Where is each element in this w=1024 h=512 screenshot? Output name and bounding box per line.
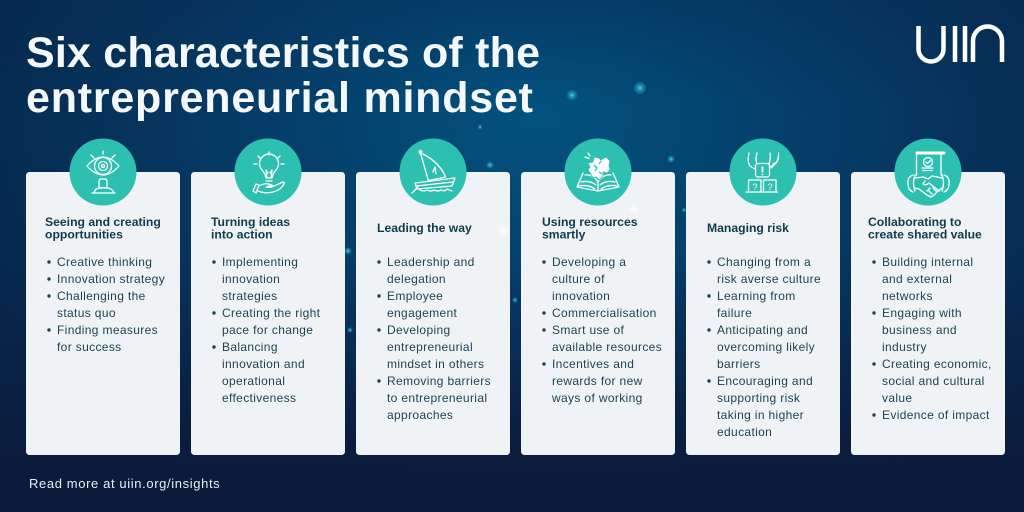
bullet list: Balancing	[222, 340, 278, 354]
bullet list: supporting risk	[717, 391, 801, 405]
bullet list: networks	[882, 289, 933, 303]
bullet list: social and cultural	[882, 374, 985, 388]
bullet list: status quo	[57, 306, 116, 320]
bullet list: for success	[57, 340, 122, 354]
bullet list: entrepreneurial	[387, 340, 473, 354]
bullet list: Learning from	[717, 289, 796, 303]
heading	[211, 215, 290, 242]
footer link text: Read more at uiin.org/insights	[29, 476, 220, 491]
heading	[542, 215, 638, 242]
logo: UIIN	[918, 26, 1002, 62]
bullet list: Developing a	[552, 255, 626, 269]
bullet list: culture of	[552, 272, 605, 286]
heading: Using resources	[542, 215, 638, 229]
bullet list: Employee	[387, 289, 443, 303]
bullet list	[47, 255, 165, 354]
title: entrepreneurial mindset	[26, 74, 533, 122]
icon: hands holding risk boxes: ?	[752, 182, 758, 193]
bullet list: and external	[882, 272, 952, 286]
icon: eye with gear	[70, 138, 136, 206]
heading: Seeing and creating	[45, 215, 161, 229]
panel: collaborating to create shared value	[851, 138, 1005, 455]
bullet list: innovation	[222, 272, 280, 286]
bullet list: Changing from a	[717, 255, 811, 269]
bullet list: Smart use of	[552, 323, 625, 337]
bullet list: Encouraging and	[717, 374, 813, 388]
bullet list	[377, 255, 491, 422]
bullet list: effectiveness	[222, 391, 296, 405]
bullet list: Engaging with	[882, 306, 962, 320]
panel: turning ideas into action	[191, 138, 345, 455]
heading: Managing risk	[707, 221, 789, 235]
bullet list: taking in higher	[717, 408, 804, 422]
heading	[868, 215, 982, 242]
bullet list: engagement	[387, 306, 458, 320]
bullet list: industry	[882, 340, 927, 354]
bullet list	[872, 255, 992, 422]
bullet list: value	[882, 391, 912, 405]
bullet list: to entrepreneurial	[387, 391, 487, 405]
title	[26, 29, 540, 122]
bullet list: pace for change	[222, 323, 313, 337]
heading: Leading the way	[377, 221, 472, 235]
bullet list: Creating the right	[222, 306, 321, 320]
bullet list: Finding measures	[57, 323, 158, 337]
bullet list: Incentives and	[552, 357, 634, 371]
bullet list	[707, 255, 821, 439]
panel: managing risk	[686, 138, 840, 455]
bullet list: operational	[222, 374, 285, 388]
bullet list: strategies	[222, 289, 278, 303]
icon: hands holding risk boxes: ?	[767, 182, 773, 193]
heading: Collaborating to	[868, 215, 961, 229]
bullet list: Creating economic,	[882, 357, 992, 371]
icon: handshake and certificate	[894, 138, 962, 206]
heading: create shared value	[868, 228, 982, 242]
bullet list: approaches	[387, 408, 453, 422]
bullet list: Creative thinking	[57, 255, 152, 269]
panel: leading the way	[356, 138, 510, 455]
bullet list: Leadership and	[387, 255, 475, 269]
icon: open book with puzzle pieces	[564, 138, 632, 206]
icon: sailboat	[400, 138, 466, 206]
icon: hands holding risk boxes	[730, 138, 796, 206]
icon: light bulb over hand	[234, 138, 302, 206]
bullet list: Building internal	[882, 255, 973, 269]
bullet list: Innovation strategy	[57, 272, 165, 286]
bullet list: ways of working	[551, 391, 643, 405]
panel: seeing and creating opportunities	[26, 138, 180, 455]
bullet list	[212, 255, 321, 405]
bullet list: innovation	[552, 289, 610, 303]
bullet list: overcoming likely	[717, 340, 815, 354]
bullet list: barriers	[717, 357, 760, 371]
bullet list: Commercialisation	[552, 306, 657, 320]
bullet list: rewards for new	[552, 374, 643, 388]
bullet list: Removing barriers	[387, 374, 491, 388]
panel: using resources smartly	[521, 138, 675, 455]
heading: into action	[211, 228, 273, 242]
heading: opportunities	[45, 228, 123, 242]
bullet list: Challenging the	[57, 289, 146, 303]
bullet list: failure	[717, 306, 752, 320]
bullet list: innovation and	[222, 357, 305, 371]
bullet list: business and	[882, 323, 957, 337]
heading	[45, 215, 161, 242]
bullet list: risk averse culture	[717, 272, 821, 286]
heading: Turning ideas	[211, 215, 290, 229]
title: Six characteristics of the	[26, 29, 540, 77]
heading: smartly	[542, 228, 586, 242]
bullet list: Developing	[387, 323, 451, 337]
bullet list: mindset in others	[387, 357, 484, 371]
bullet list: Anticipating and	[717, 323, 808, 337]
bullet list: Evidence of impact	[882, 408, 990, 422]
bullet list: delegation	[387, 272, 446, 286]
bullet list: available resources	[552, 340, 662, 354]
bullet list: education	[717, 425, 772, 439]
bullet list	[542, 255, 662, 405]
bullet list: Implementing	[222, 255, 298, 269]
